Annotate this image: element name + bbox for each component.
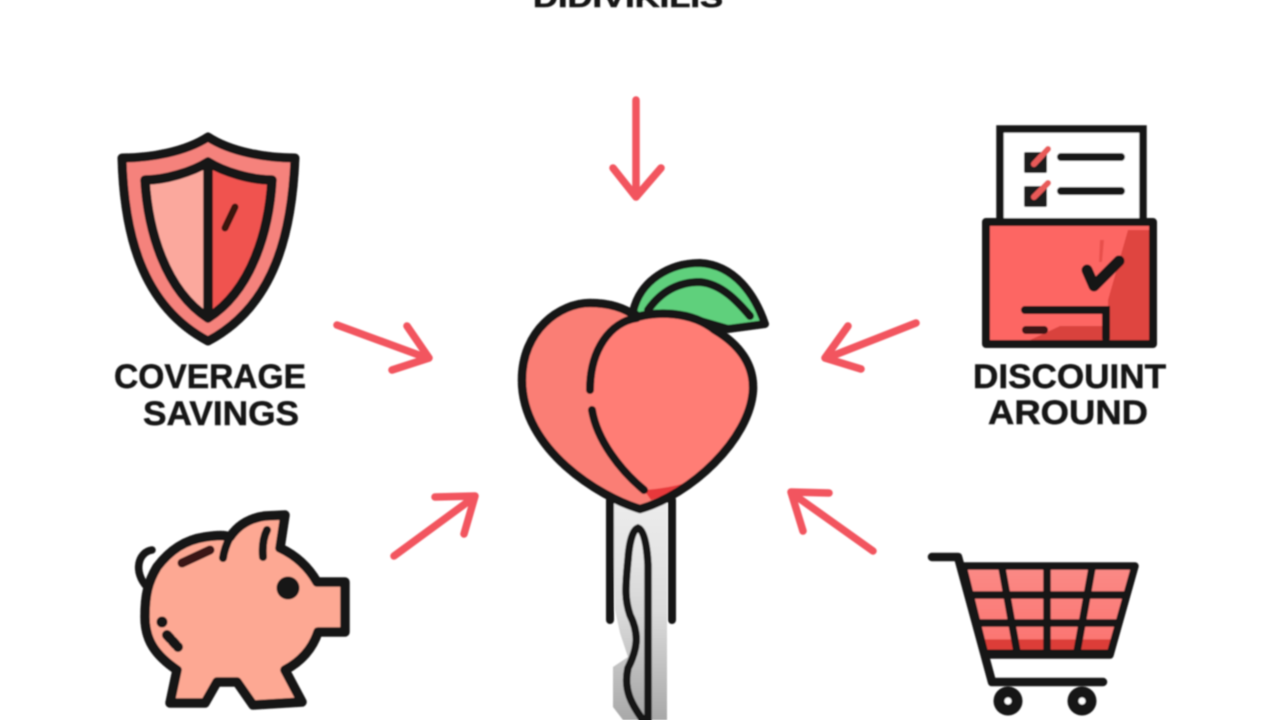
label: discount around bbox=[973, 358, 1166, 432]
arrow: top bbox=[613, 100, 661, 197]
checklist paper bbox=[1000, 129, 1143, 225]
label: discount around: AROUND bbox=[988, 394, 1148, 432]
icon: shopping cart bbox=[932, 557, 1135, 716]
label: coverage savings: COVERAGE bbox=[114, 358, 306, 396]
label: discount around: DISCOUINT bbox=[973, 358, 1166, 396]
key blade bbox=[610, 500, 672, 720]
icon: discount checklist bbox=[986, 129, 1153, 344]
cart wheels bbox=[994, 686, 1096, 716]
label: coverage savings: SAVINGS bbox=[143, 395, 299, 433]
icon: shield bbox=[122, 137, 295, 341]
label: coverage savings bbox=[114, 358, 306, 433]
icon: peach key bbox=[522, 263, 765, 720]
arrow: lower right bbox=[791, 492, 873, 551]
leaf bbox=[633, 263, 765, 329]
red folder bbox=[986, 222, 1153, 344]
peach body bbox=[522, 303, 753, 509]
arrow: upper right bbox=[825, 323, 916, 369]
arrow: upper left bbox=[337, 325, 429, 370]
arrow: lower left bbox=[394, 496, 475, 556]
icon: piggy bank bbox=[139, 515, 345, 705]
